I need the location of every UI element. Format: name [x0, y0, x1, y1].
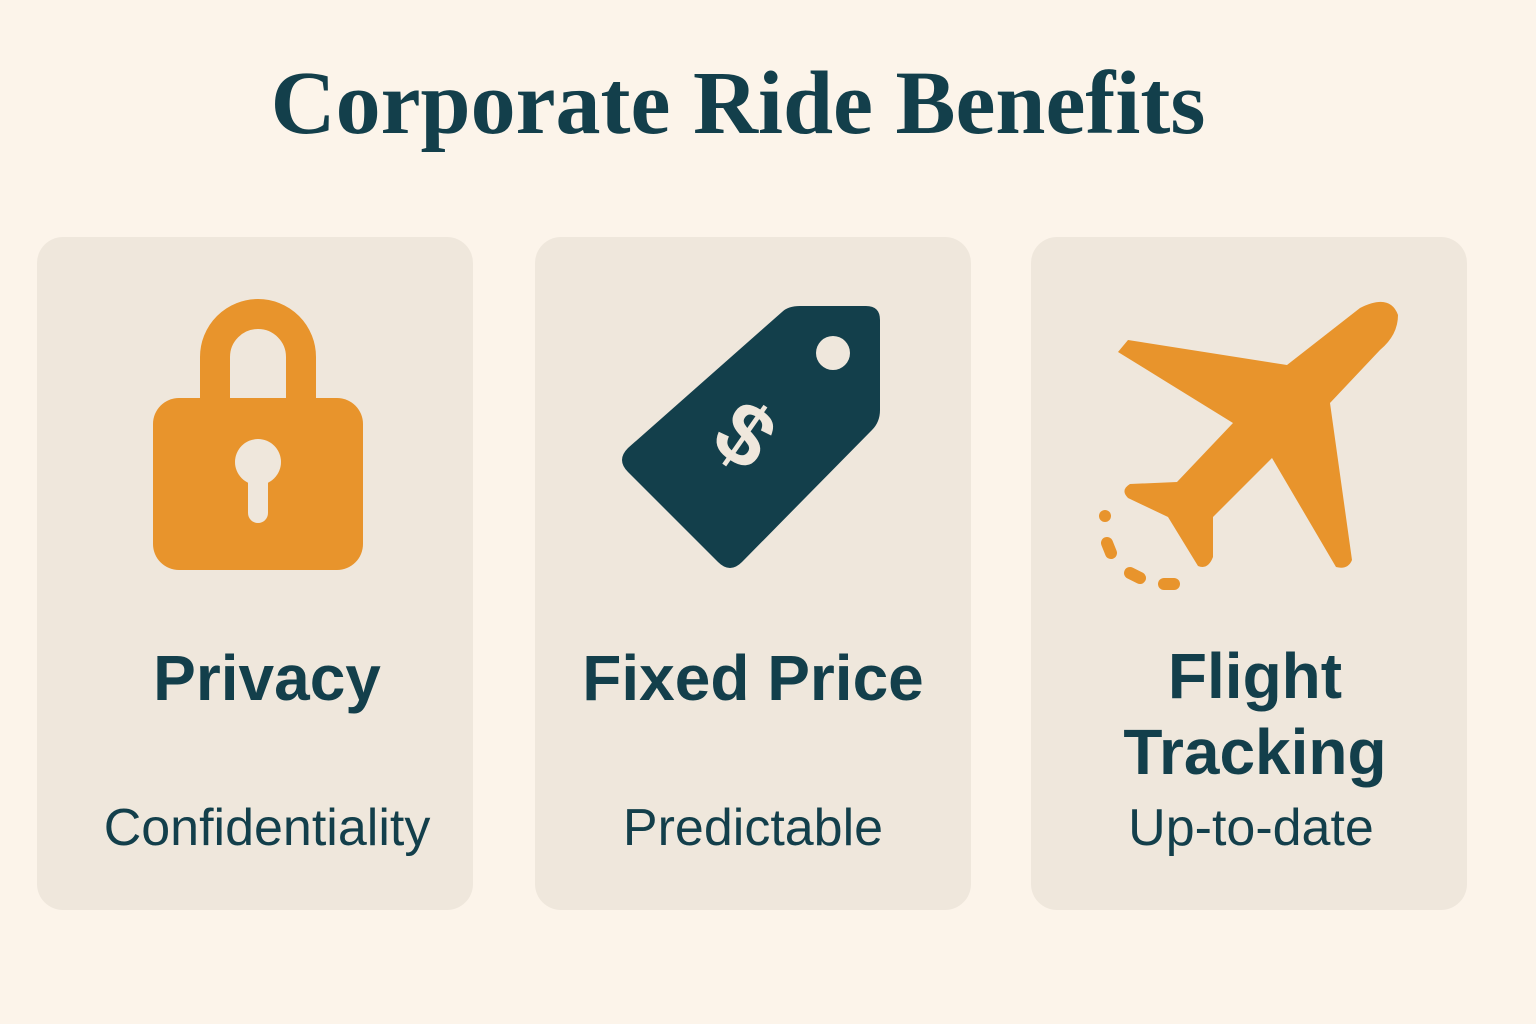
heading: privacy: Privacy: [153, 642, 381, 714]
heading: fixed price: Fixed Price: [582, 642, 924, 714]
panel: privacy: [37, 237, 473, 910]
heading: flight tracking: Tracking: [1123, 716, 1387, 788]
icon: price tag: [622, 306, 880, 568]
text: up-to-date: Up-to-date: [1128, 799, 1374, 857]
icon: price tag: $: [697, 380, 794, 489]
panel: flight tracking: [1031, 237, 1467, 910]
text: predictable: Predictable: [623, 799, 883, 857]
heading: flight tracking: [1123, 640, 1387, 788]
icon: airplane: [1099, 302, 1398, 590]
heading: flight tracking: Flight: [1168, 640, 1342, 712]
icon: lock: [153, 299, 363, 570]
panel: fixed price: [535, 237, 971, 910]
text: confidentiality: Confidentiality: [104, 799, 430, 857]
title: Corporate Ride Benefits: [271, 54, 1205, 153]
